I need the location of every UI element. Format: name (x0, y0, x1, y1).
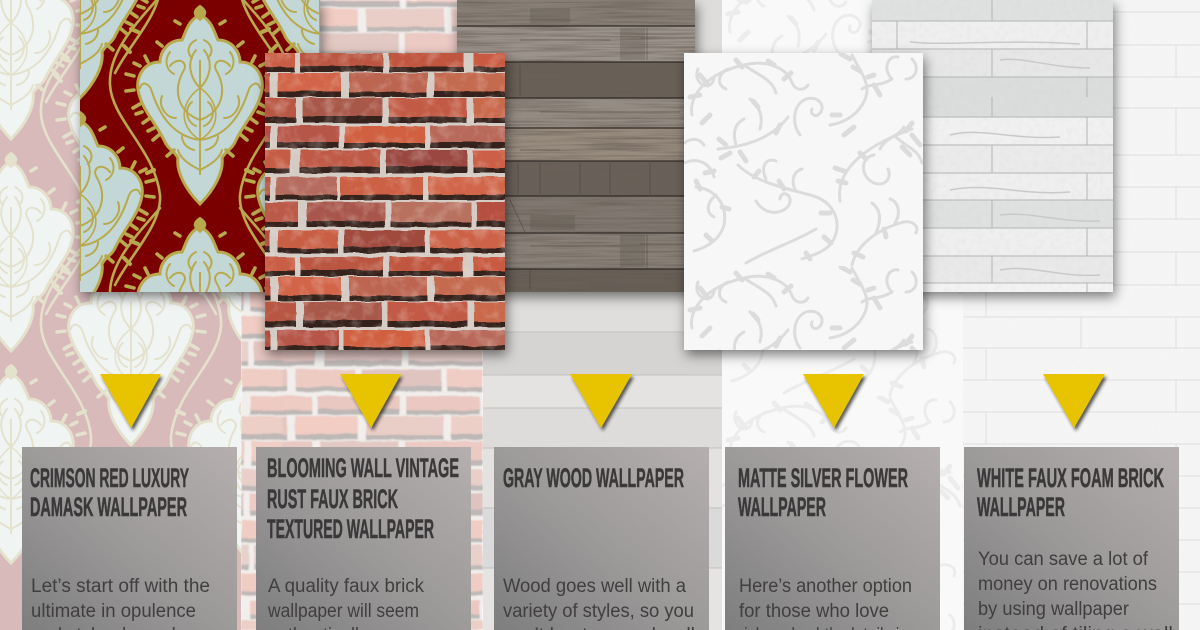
background panel: faded faux brick (241, 0, 483, 630)
text: damask description: ultimate in opulence (31, 601, 196, 622)
text: flower description: for those who love (739, 601, 889, 622)
background panel: pale white brick (963, 0, 1200, 630)
swatch: white faux foam brick (872, 0, 1113, 292)
text: wood description (503, 576, 695, 630)
text: flower description: Here’s another option (739, 576, 912, 597)
background panel: pale wood planks (483, 0, 722, 630)
panel: crimson damask (22, 447, 237, 630)
swatch: gray wood (457, 0, 695, 292)
heading: crimson damask: DAMASK WALLPAPER (30, 492, 187, 522)
heading: rust faux brick: BLOOMING WALL VINTAGE (267, 453, 459, 483)
text: damask description: Let’s start off with the (31, 576, 210, 597)
heading: matte silver flower: WALLPAPER (738, 492, 826, 522)
heading: white faux foam brick (977, 463, 1164, 522)
heading: matte silver flower (738, 463, 908, 522)
text: wood description: Wood goes well with a (503, 576, 686, 597)
panel: white faux foam brick (964, 447, 1179, 630)
heading: crimson damask (30, 463, 189, 522)
text: brick description: wallpaper will seem (267, 601, 419, 622)
arrow: flower (803, 374, 864, 428)
arrow: wood (570, 374, 632, 428)
text: white brick description: You can save a lot of (978, 549, 1149, 570)
text: brick description: A quality faux brick (268, 576, 424, 597)
text: white brick description: by using wallpaper (978, 599, 1130, 620)
panel: gray wood (494, 447, 709, 630)
heading: rust faux brick: RUST FAUX BRICK (267, 484, 398, 514)
heading: rust faux brick: TEXTURED WALLPAPER (267, 514, 434, 544)
panel: matte silver flower (725, 447, 940, 630)
heading: crimson damask: CRIMSON RED LUXURY (30, 463, 189, 493)
background panel: damask wallpaper (0, 0, 241, 630)
text: brick description (267, 576, 424, 630)
text: flower description (739, 576, 912, 630)
heading: white faux foam brick: WALLPAPER (977, 492, 1065, 522)
text: white brick description (978, 549, 1173, 630)
swatch: matte silver flower (684, 53, 923, 350)
swatch: rust faux brick (255, 43, 515, 360)
heading: gray wood: GRAY WOOD WALLPAPER (503, 463, 684, 493)
heading: rust faux brick (267, 453, 459, 544)
text: white brick description: money on renovations (978, 574, 1157, 595)
swatch: crimson damask (6, 0, 394, 497)
heading: matte silver flower: MATTE SILVER FLOWER (738, 463, 908, 493)
arrow: brick (340, 374, 401, 428)
text: damask description (31, 576, 210, 630)
arrow: damask (100, 374, 161, 428)
panel: rust faux brick (256, 447, 471, 630)
background panel: pale floral (722, 0, 963, 630)
arrow: white brick (1043, 374, 1105, 428)
text: wood description: variety of styles, so you (503, 601, 694, 622)
